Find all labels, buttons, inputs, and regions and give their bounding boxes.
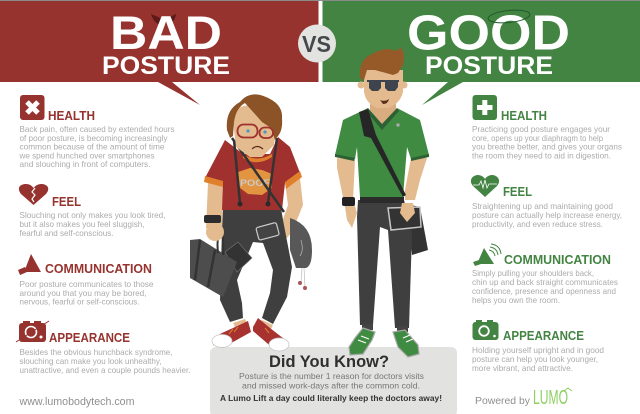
text: good health body: the room they need to aid in digestion. bbox=[472, 152, 611, 160]
text: bad appearance body: slouching can make you look unhealthy, bbox=[20, 357, 162, 366]
powered by lumo logo: Powered by bbox=[475, 395, 531, 407]
text: did you know body bbox=[239, 371, 424, 390]
vs badge: VS bbox=[302, 31, 331, 57]
icon: camera bbox=[472, 320, 498, 340]
phone bbox=[256, 222, 279, 240]
heading: feel: FEEL bbox=[52, 195, 81, 209]
text: bad communication body: nervous, fearful or self-conscious. bbox=[20, 298, 140, 306]
text: bad appearance body: Besides the obvious hunchback syndrome, bbox=[20, 348, 172, 357]
icon: plus bbox=[472, 95, 497, 120]
shoulder strap bbox=[359, 109, 406, 197]
text: bad health body: and slouching in front of computers. bbox=[20, 160, 150, 169]
panel: bad health bbox=[19, 95, 175, 169]
icon: broken heart bbox=[19, 184, 48, 205]
laptop bag bbox=[410, 205, 428, 255]
text: good feel body: productivity, and even reduce stress. bbox=[472, 220, 603, 229]
text: bad communication body: around you that you may be bored, bbox=[20, 289, 146, 298]
heading: communication: COMMUNICATION bbox=[45, 262, 152, 276]
head bbox=[227, 94, 282, 157]
text: bad communication body bbox=[20, 280, 154, 306]
text: good health body: you breathe better, and gives your organs bbox=[472, 142, 622, 152]
heading: communication: COMMUNICATION bbox=[504, 253, 611, 267]
icon: devil horns bbox=[151, 14, 176, 25]
text: good communication body: confidence, presence and openness and bbox=[472, 287, 616, 296]
text: good appearance body: more vibrant, and attractive. bbox=[472, 364, 573, 373]
panel: good appearance bbox=[472, 320, 604, 373]
text: good communication body bbox=[472, 269, 618, 305]
icon: megaphone with sound waves bbox=[473, 244, 501, 266]
briefcase bbox=[190, 239, 237, 297]
icon: halo bbox=[487, 8, 531, 25]
text: good feel body bbox=[472, 202, 622, 229]
heading: good posture subtitle: POSTURE bbox=[425, 52, 553, 80]
text: bad feel body: but it also makes you feel sluggish, bbox=[20, 220, 144, 229]
text: bad health body: we spend hunched over smartphones bbox=[19, 152, 155, 160]
heading: health: HEALTH bbox=[501, 109, 547, 123]
powered by lumo logo: LUMO bbox=[533, 387, 568, 409]
trousers bbox=[220, 208, 292, 324]
panel: bad feel bbox=[19, 184, 166, 238]
text: good feel body: Straightening up and maintaining good bbox=[472, 202, 613, 211]
heading: health: HEALTH bbox=[48, 109, 95, 123]
left hand bbox=[206, 223, 224, 241]
icon: x mark bbox=[20, 95, 44, 120]
sunglasses bbox=[367, 80, 399, 91]
icon: broken camera bbox=[16, 321, 49, 342]
glasses bbox=[238, 124, 273, 138]
text: bad health body: common because of the amount of time bbox=[20, 142, 165, 152]
powered by lumo logo bbox=[475, 387, 572, 409]
shirt: POOF bbox=[240, 178, 271, 188]
text: bad feel body bbox=[20, 211, 166, 238]
vs badge bbox=[298, 24, 336, 62]
illustration: slouching man bbox=[190, 94, 312, 351]
text: did you know body: and missed work-days after the common cold. bbox=[242, 380, 420, 390]
text: good health body: Practicing good posture engages your bbox=[472, 125, 610, 134]
panel: good feel bbox=[471, 175, 622, 229]
text: bad feel body: Slouching not only makes you look tired, bbox=[20, 211, 166, 220]
tablet bbox=[225, 242, 252, 272]
arms bbox=[206, 183, 223, 228]
panel: bad appearance bbox=[16, 321, 190, 375]
heading: bad posture subtitle: POSTURE bbox=[102, 52, 230, 80]
text: good health body bbox=[472, 125, 622, 160]
website url: www.lumobodytech.com bbox=[19, 396, 135, 408]
shirt bbox=[204, 137, 302, 210]
text: good communication body: Simply pulling your shoulders back, bbox=[472, 269, 594, 278]
head bbox=[358, 47, 408, 108]
heading: appearance: APPEARANCE bbox=[503, 329, 584, 343]
heading: did you know: Did You Know? bbox=[269, 352, 389, 371]
heading: good: GOOD bbox=[407, 6, 570, 60]
tablet bbox=[388, 207, 421, 230]
panel: good health bbox=[472, 95, 622, 160]
text: bad appearance body bbox=[20, 348, 190, 375]
shoes bbox=[349, 324, 419, 357]
icon: heartbeat heart bbox=[471, 175, 499, 197]
text: bad health body bbox=[19, 125, 175, 169]
shoes bbox=[212, 318, 289, 351]
panel: did you know bbox=[210, 347, 457, 414]
text: did you know tagline: A Lumo Lift a day could literally keep the doctors away! bbox=[220, 393, 442, 403]
panel: bad communication bbox=[18, 254, 154, 306]
text: good appearance body: posture can help you look younger, bbox=[472, 355, 598, 364]
text: good appearance body bbox=[472, 346, 604, 373]
straps bbox=[232, 138, 284, 212]
hand bbox=[400, 203, 415, 222]
illustration: upright man bbox=[335, 47, 429, 357]
arms bbox=[337, 158, 357, 228]
text: bad appearance body: unattractive, and even a couple pounds heavier. bbox=[20, 366, 190, 375]
heading: appearance: APPEARANCE bbox=[49, 331, 130, 345]
panel: bad posture header bbox=[0, 1, 318, 105]
neck bbox=[370, 100, 396, 127]
icon: megaphone bbox=[18, 254, 41, 275]
heading: feel: FEEL bbox=[503, 185, 532, 199]
text: bad feel body: fearful and self-conscious. bbox=[20, 229, 114, 238]
panel: good communication bbox=[472, 244, 618, 305]
panel: good posture header bbox=[322, 1, 640, 105]
trousers bbox=[357, 200, 412, 328]
text: good appearance body: Holding yourself upright and in good bbox=[472, 346, 604, 355]
heading: bad: BAD bbox=[110, 6, 222, 59]
text: bad health body: of poor posture, is becoming increasingly bbox=[20, 134, 168, 143]
text: did you know body: Posture is the number 1 reason for doctors visits bbox=[239, 371, 424, 381]
text: good communication body: helps you own the room. bbox=[472, 296, 560, 305]
text: good health body: core, opens up your diaphragm to help bbox=[472, 134, 603, 143]
watch bbox=[342, 197, 355, 206]
text: bad communication body: Poor posture communicates to those bbox=[20, 280, 154, 289]
text: good communication body: chin up and back straight communicates bbox=[472, 278, 618, 287]
watch bbox=[204, 215, 221, 223]
shirt bbox=[335, 108, 429, 203]
messenger bag bbox=[290, 218, 312, 290]
text: bad health body: Back pain, often caused by extended hours bbox=[20, 125, 174, 134]
text: good feel body: posture can actually help increase energy, bbox=[472, 211, 622, 220]
